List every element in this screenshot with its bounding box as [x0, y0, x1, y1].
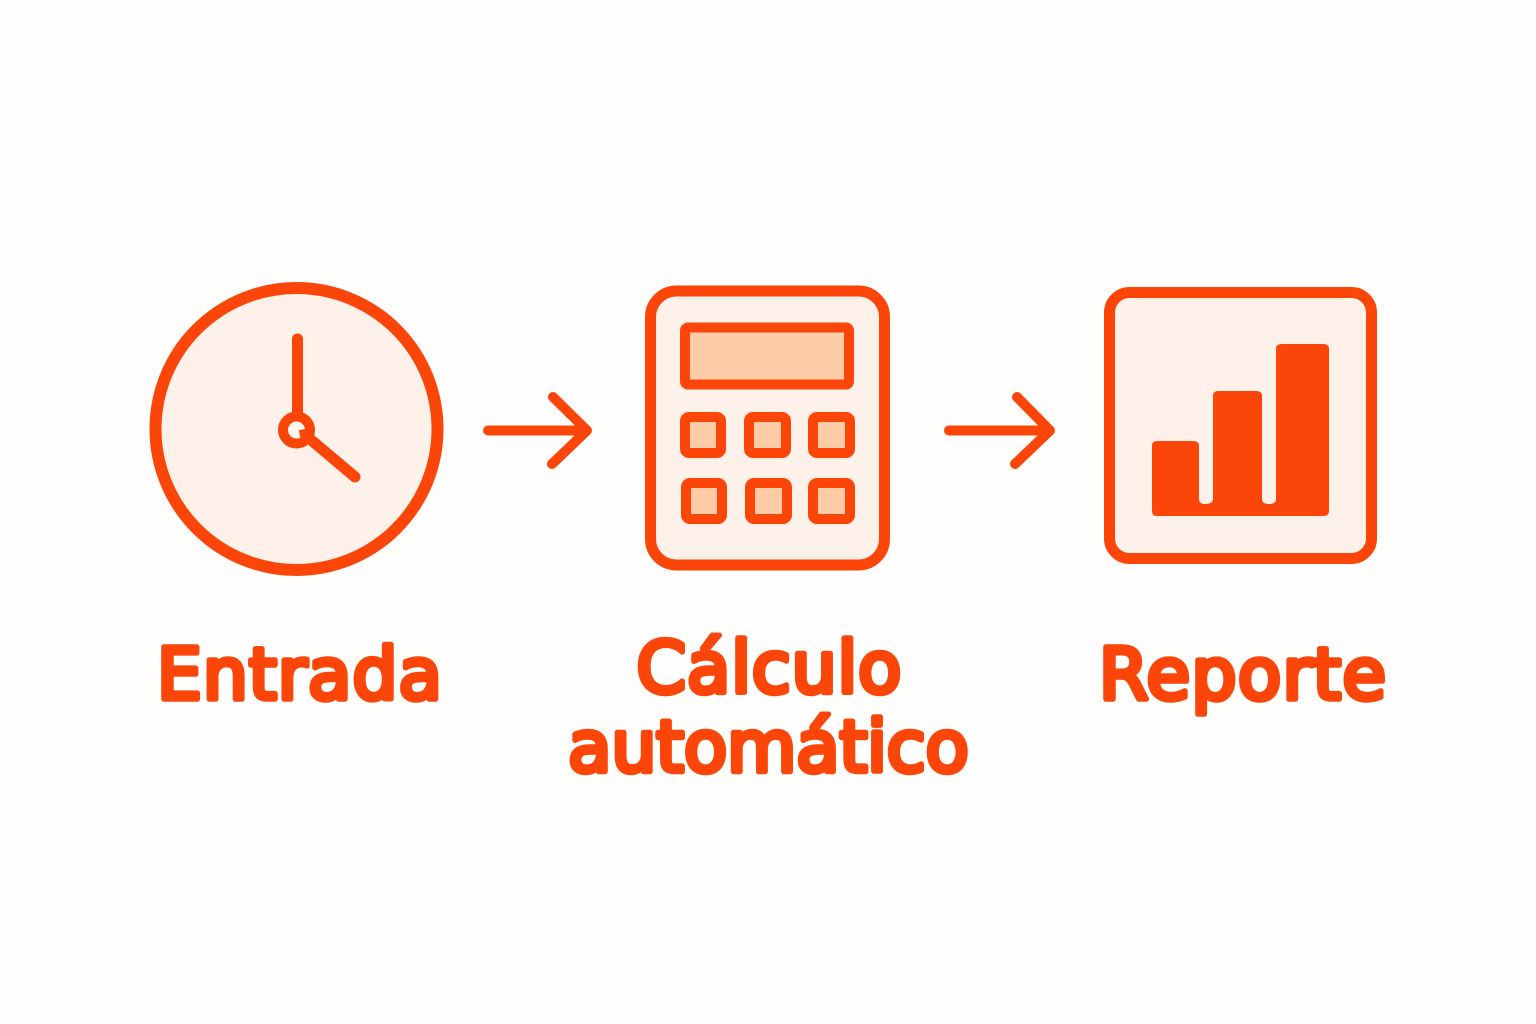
label: Cálculo automático: automático: [568, 706, 969, 788]
label: Cálculo automático: [568, 626, 969, 788]
arrow: entrada to calculo: [488, 397, 587, 464]
icon: report bar chart: [1110, 292, 1372, 558]
calculator keys: [685, 417, 850, 519]
label: Entrada: Entrada: [157, 633, 442, 716]
bars: [1152, 344, 1329, 516]
label: Reporte: Reporte: [1099, 633, 1386, 716]
calculator display: [685, 328, 849, 384]
icon: clock: [156, 288, 438, 570]
arrow: calculo to reporte: [949, 397, 1050, 464]
label: Cálculo automático: Cálculo: [636, 626, 902, 710]
icon: calculator: [650, 291, 884, 565]
